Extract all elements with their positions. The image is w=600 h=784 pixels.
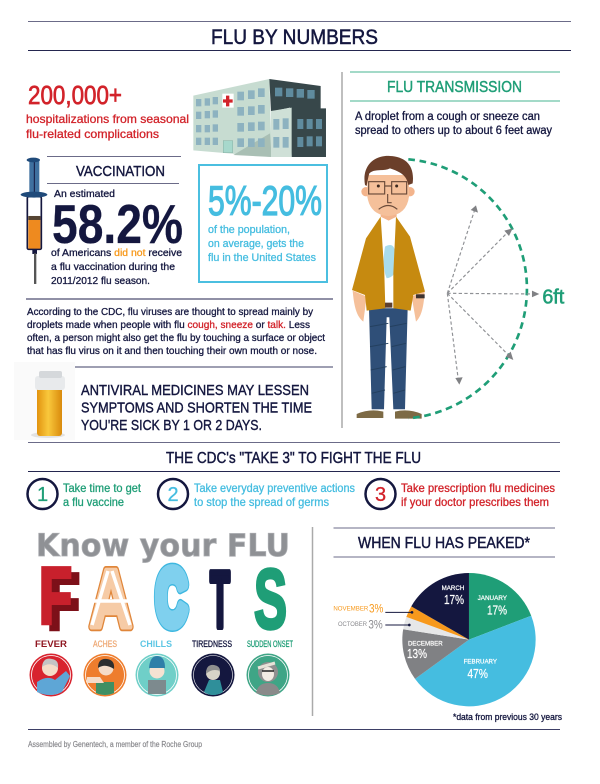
footnote: *data from previous 30 years — [453, 712, 562, 723]
pie chart: peak months: FEBRUARY — [464, 659, 497, 666]
callout: 5 to 20 percent — [199, 165, 327, 282]
callout: 5 to 20 percent: on average, gets the — [208, 238, 304, 250]
text block: how flu spreads: often, a person might also get the flu by touching a surface or object — [27, 332, 325, 344]
pie chart: peak months: MARCH — [442, 585, 464, 592]
heading: flu transmission — [350, 72, 560, 101]
text: T — [210, 555, 230, 644]
letter C: C — [156, 553, 187, 641]
illustration: man with glasses — [352, 156, 425, 419]
icon: hospital building — [193, 79, 326, 157]
text block: antiviral medicines: ANTIVIRAL MEDICINES MAY LESSEN — [81, 382, 309, 399]
icon: tiredness — [192, 654, 234, 696]
text block: how flu spreads — [27, 306, 325, 357]
step 2: 2 — [167, 484, 179, 506]
pie chart: peak months: 17% — [444, 593, 464, 607]
stat: 58.2 percent not vaccinated: 2011/2012 flu season. — [51, 275, 150, 287]
step 2: to stop the spread of germs — [194, 495, 329, 509]
letter F: F — [39, 551, 72, 640]
pie chart: peak months: DECEMBER — [408, 640, 443, 647]
letter A: A — [90, 554, 132, 645]
stat: 58.2 percent not vaccinated: 58.2% — [52, 193, 183, 255]
heading: know your flu: Know your FLU — [36, 528, 290, 564]
step 1 — [28, 479, 142, 509]
pie chart: peak months: JANUARY — [478, 595, 508, 602]
step 1: 1 — [37, 484, 48, 506]
pie chart: peak months: 3% — [369, 602, 384, 616]
text block: antiviral medicines — [81, 382, 312, 434]
letter C: C — [156, 553, 187, 641]
heading: when flu has peaked: WHEN FLU HAS PEAKED* — [358, 535, 530, 552]
text block: droplet — [355, 111, 552, 137]
step 3: 3 — [375, 484, 386, 506]
stat: 58.2 percent not vaccinated — [51, 188, 183, 287]
heading: vaccination: VACCINATION — [76, 163, 165, 180]
pie chart: peak months: 3% — [368, 617, 383, 631]
stat: 58.2 percent not vaccinated: An estimated — [54, 188, 115, 200]
heading: take 3: THE CDC's "TAKE 3" TO FIGHT THE FLU — [166, 450, 421, 467]
stat: hospitalizations: flu-related complications — [26, 127, 159, 141]
footer: Assembled by Genentech, a member of the Roche Group — [28, 740, 202, 749]
text block: droplet: spread to others up to about 6 feet away — [355, 125, 552, 137]
diagram: droplet spread arrows: 6ft — [542, 286, 565, 308]
stat: hospitalizations: hospitalizations from seasonal — [26, 112, 189, 126]
symptom labels: CHILLS — [140, 639, 172, 649]
icon: chills — [136, 654, 178, 696]
symptom labels — [35, 639, 293, 649]
step 2 — [158, 479, 355, 509]
callout: 5 to 20 percent: of the population, — [208, 224, 290, 236]
icon: fever — [30, 654, 72, 696]
icon: sudden onset — [246, 654, 290, 696]
symptom labels: ACHES — [93, 639, 117, 649]
icon: pill bottle — [14, 362, 75, 440]
text block: how flu spreads: According to the CDC, flu viruses are thought to spread mainly by — [27, 306, 314, 318]
step 3 — [366, 479, 555, 509]
letter S: S — [254, 552, 287, 646]
step 3: Take prescription flu medicines — [401, 481, 555, 495]
symptom labels: SUDDEN ONSET — [247, 639, 293, 649]
text block: how flu spreads: droplets made when people with flu cough, sneeze or talk. Less — [27, 319, 310, 331]
stat: 58.2 percent not vaccinated: of Americans did not receive — [51, 247, 182, 259]
callout: 5 to 20 percent: flu in the United States — [208, 252, 316, 264]
text block: how flu spreads: that has flu virus on it and then touching their own mouth or nose. — [27, 345, 317, 357]
heading: flu transmission: FLU TRANSMISSION — [387, 79, 522, 96]
pie chart: peak months: OCTOBER — [338, 621, 367, 628]
step 1: Take time to get — [63, 481, 142, 495]
pie chart: peak months: 17% — [487, 603, 507, 617]
pie chart: peak months: NOVEMBER — [333, 605, 369, 612]
diagram: droplet spread arrows — [408, 159, 565, 418]
text block: antiviral medicines: SYMPTOMS AND SHORTEN THE TIME — [81, 400, 312, 416]
letter A: A — [90, 554, 132, 645]
stat: 58.2 percent not vaccinated: a flu vaccination during the — [51, 261, 175, 273]
pie chart: peak months: 13% — [407, 647, 427, 661]
step 1: a flu vaccine — [63, 495, 124, 509]
callout: 5 to 20 percent: 5%-20% — [208, 177, 322, 224]
pie chart: peak months: 47% — [467, 667, 488, 681]
icon: aches — [84, 654, 126, 696]
icon: syringe — [21, 158, 47, 284]
step 3: if your doctor prescribes them — [401, 495, 549, 509]
step 2: Take everyday preventive actions — [194, 481, 355, 495]
symptom labels: FEVER — [35, 639, 68, 649]
text block: antiviral medicines: YOU'RE SICK BY 1 OR 2 DAYS. — [81, 417, 262, 434]
text block: droplet: A droplet from a cough or sneeze can — [355, 111, 540, 123]
stat: hospitalizations — [26, 80, 189, 141]
letter F: F — [47, 557, 80, 646]
letter C — [156, 553, 187, 641]
symptom labels: TIREDNESS — [192, 639, 232, 649]
title: FLU BY NUMBERS — [211, 26, 378, 49]
stat: hospitalizations: 200,000+ — [28, 80, 122, 110]
pie chart: peak months — [333, 573, 536, 706]
